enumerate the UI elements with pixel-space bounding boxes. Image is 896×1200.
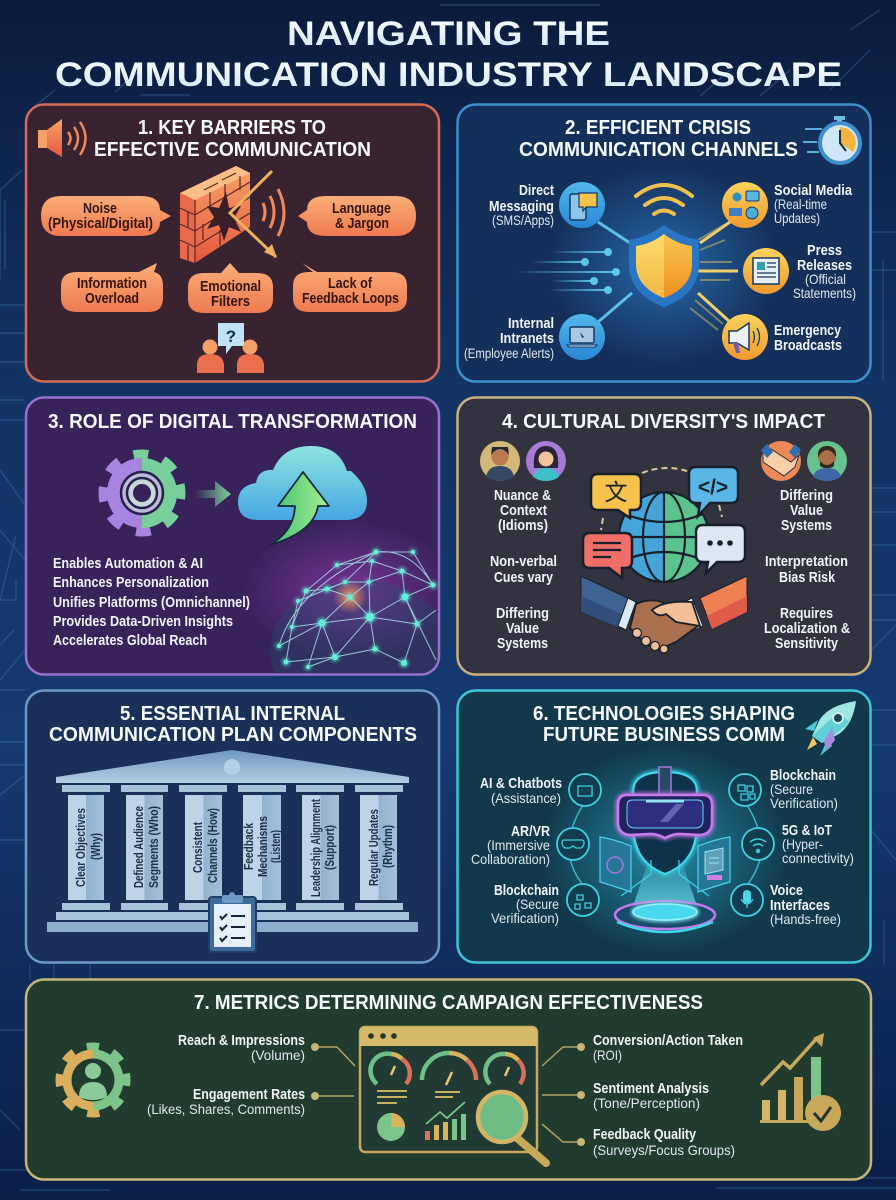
bullet list: Unifies Platforms (Omnichannel) [53, 594, 250, 611]
right labels: Sensitivity [775, 635, 839, 652]
illustration: temple steps [47, 912, 418, 932]
right labels: Localization & [764, 620, 850, 637]
bullet list: Enables Automation & AI [53, 555, 203, 572]
labels left: Engagement Rates [193, 1086, 305, 1103]
illustration: handshake [581, 576, 747, 653]
labels left: AI & Chatbots [480, 775, 562, 792]
labels right: Blockchain [770, 767, 836, 784]
column: feedback mechanisms: Feedback [241, 822, 256, 870]
icon: broken brick wall with deflected signal [180, 166, 284, 263]
illustration: pediment [56, 750, 409, 783]
labels left: (Volume) [251, 1047, 305, 1063]
labels left: (Assistance) [491, 790, 561, 806]
callout: information overload [61, 263, 163, 312]
panel 5: internal plan components [26, 690, 439, 962]
connectors and speed lines [515, 222, 738, 330]
illustration: network globe [254, 529, 438, 673]
pie [377, 1113, 405, 1141]
illustration: orbit arcs and VR head [569, 767, 761, 932]
labels right: (ROI) [593, 1047, 622, 1063]
column: leadership alignment [296, 785, 344, 910]
column: feedback mechanisms: Mechanisms [255, 816, 270, 877]
channel: internal intranets: Intranets [500, 330, 554, 347]
labels right: connectivity) [782, 850, 854, 866]
right labels: Interpretation [765, 553, 848, 570]
column: leadership alignment: Leadership Alignment [308, 799, 323, 897]
heading 7: 7. METRICS DETERMINING CAMPAIGN EFFECTIVENESS [194, 991, 703, 1014]
labels right: (Secure [770, 781, 813, 797]
icon: growth chart with check [760, 1033, 841, 1131]
callout: information overload: Information [77, 275, 147, 292]
callout: language and jargon [298, 196, 416, 236]
labels right: Interfaces [770, 897, 830, 914]
heading 2: COMMUNICATION CHANNELS [519, 138, 798, 161]
icon: gear [98, 449, 186, 537]
labels right: Verification) [770, 795, 838, 811]
channel: internal intranets: Internal [508, 315, 554, 332]
channel: press releases: Statements) [793, 285, 856, 301]
column: regular updates: (Rhythm) [380, 825, 395, 868]
icon row left: AI, AR/VR, blockchain [557, 774, 601, 916]
callout: noise: (Physical/Digital) [48, 215, 153, 232]
heading 5: 5. ESSENTIAL INTERNAL [120, 702, 345, 725]
title [55, 15, 842, 94]
labels left: Collaboration) [471, 851, 550, 867]
column: regular updates: Regular Updates [366, 809, 381, 886]
bullet list: Accelerates Global Reach [53, 632, 207, 649]
column: clear objectives: Clear Objectives [73, 808, 88, 887]
channel: press releases [743, 242, 856, 301]
panel 2: crisis channels [458, 104, 870, 382]
column: defined audience [121, 785, 168, 910]
arrow: gear to cloud [195, 481, 231, 507]
icon: magnifier [478, 1092, 546, 1163]
right labels: Value [790, 502, 823, 519]
heading 3: 3. ROLE OF DIGITAL TRANSFORMATION [48, 410, 417, 433]
left labels: Nuance & [494, 487, 551, 504]
left labels: Differing [496, 605, 549, 622]
labels right: Sentiment Analysis [593, 1080, 709, 1097]
labels left: AR/VR [511, 823, 550, 840]
column: regular updates [355, 785, 403, 910]
avatars right [761, 441, 847, 481]
callout: language and jargon: Language [332, 200, 391, 217]
avatars left [480, 441, 566, 481]
icon: gear with person [54, 1041, 132, 1119]
left labels: Non-verbal [490, 553, 557, 570]
labels right [593, 1032, 743, 1158]
right labels: Systems [781, 517, 832, 534]
illustration: dashboard window [360, 1027, 537, 1152]
callout: emotional filters: Filters [211, 293, 250, 310]
icon: clipboard checklist [209, 892, 256, 952]
column: leadership alignment: (Support) [322, 825, 337, 870]
illustration: globe with speech bubbles: </> [698, 476, 728, 499]
heading 5 [49, 702, 417, 746]
title: COMMUNICATION INDUSTRY LANDSCAPE [55, 56, 842, 94]
icon row right: blockchain, 5G, voice [729, 774, 774, 916]
right labels: Bias Risk [779, 569, 836, 586]
panel 4: cultural diversity [458, 398, 870, 674]
channel: direct messaging [489, 182, 605, 228]
heading 6: FUTURE BUSINESS COMM [543, 723, 785, 746]
illustration: globe with speech bubbles: 文 [604, 479, 628, 505]
labels left [471, 775, 562, 926]
channel: direct messaging: Direct [519, 182, 554, 199]
labels left: (Immersive [487, 837, 550, 853]
channel: press releases: (Official [805, 271, 846, 287]
left labels: Context [500, 502, 547, 519]
column: defined audience: Defined Audience [131, 806, 146, 888]
heading 6: 6. TECHNOLOGIES SHAPING [533, 702, 795, 725]
labels right: (Hands-free) [770, 911, 841, 927]
labels right: Conversion/Action Taken [593, 1032, 743, 1049]
panel 6: future technologies [458, 690, 870, 962]
channel: press releases: Press [807, 242, 842, 259]
column: consistent channels: Channels (How) [205, 808, 220, 883]
labels right: 5G & IoT [782, 822, 832, 839]
heading 2: 2. EFFICIENT CRISIS [565, 116, 751, 139]
icon: signal arcs [636, 185, 692, 214]
labels left: (Secure [516, 896, 559, 912]
heading 6 [533, 702, 795, 746]
left labels: Cues vary [494, 569, 554, 586]
right labels [764, 487, 850, 652]
labels right: (Surveys/Focus Groups) [593, 1142, 735, 1158]
labels right: Feedback Quality [593, 1126, 697, 1143]
channel: press releases: Releases [797, 257, 852, 274]
heading 1: EFFECTIVE COMMUNICATION [94, 138, 371, 161]
callout: lack of feedback loops: Feedback Loops [302, 290, 399, 307]
labels right [770, 767, 854, 927]
heading 2 [519, 116, 798, 161]
callout: information overload: Overload [85, 290, 139, 307]
column: consistent channels [179, 785, 227, 910]
column: feedback mechanisms [238, 785, 286, 910]
icon: two people with question [197, 323, 264, 373]
left labels [490, 487, 557, 652]
column: clear objectives: (Why) [88, 833, 103, 860]
column: feedback mechanisms: (Listen) [268, 830, 283, 863]
icon: stopwatch [803, 116, 860, 163]
labels left: Reach & Impressions [178, 1032, 305, 1049]
channel: social media [722, 182, 853, 228]
labels left [147, 1032, 305, 1117]
panel 1: key barriers [26, 104, 439, 382]
callout: noise: Noise [83, 200, 117, 217]
callout: lack of feedback loops: Lack of [328, 275, 373, 292]
left labels: Value [506, 620, 539, 637]
labels left: (Likes, Shares, Comments) [147, 1101, 305, 1117]
channel: emergency broadcasts: Broadcasts [774, 337, 842, 354]
icon: two people with question: ? [226, 327, 236, 346]
left labels: (Idioms) [498, 517, 548, 534]
illustration: globe with speech bubbles [583, 467, 745, 582]
icon: rocket [805, 701, 856, 756]
connectors [311, 1043, 585, 1146]
channel: internal intranets: (Employee Alerts) [464, 345, 554, 361]
channel: social media: Social Media [774, 182, 853, 199]
callout: noise [41, 196, 171, 236]
callout: emotional filters: Emotional [200, 278, 261, 295]
icon: shield [629, 225, 699, 307]
bars and trend [425, 1102, 466, 1140]
heading 5: COMMUNICATION PLAN COMPONENTS [49, 723, 417, 746]
left labels: Systems [497, 635, 548, 652]
channel: direct messaging: (SMS/Apps) [492, 212, 554, 228]
labels left: Verification) [491, 910, 559, 926]
heading 1 [94, 116, 371, 161]
panel 7: campaign metrics [26, 980, 871, 1180]
callout: language and jargon: & Jargon [335, 215, 389, 232]
channel: social media: Updates) [774, 210, 820, 226]
title: NAVIGATING THE [287, 15, 610, 53]
panel 3: digital transformation [24, 396, 440, 676]
right labels: Requires [780, 605, 833, 622]
channel: emergency broadcasts: Emergency [774, 322, 842, 339]
gauges [371, 1053, 524, 1085]
heading 4: 4. CULTURAL DIVERSITY'S IMPACT [502, 410, 825, 433]
bullet list [53, 555, 250, 649]
channel: emergency broadcasts [722, 314, 842, 360]
channel: internal intranets [464, 314, 605, 361]
column: defined audience: Segments (Who) [146, 806, 161, 888]
labels right: Voice [770, 882, 803, 899]
callout: emotional filters [188, 263, 273, 313]
icon: cloud with up arrow [238, 446, 367, 545]
column: consistent channels: Consistent [190, 821, 205, 873]
channel: social media: (Real-time [774, 196, 827, 212]
labels left: Blockchain [494, 882, 559, 899]
summary lines [377, 1091, 460, 1103]
right labels: Differing [780, 487, 833, 504]
column: clear objectives [62, 785, 110, 910]
bullet list: Enhances Personalization [53, 574, 209, 591]
callout: lack of feedback loops [293, 263, 407, 312]
channel: direct messaging: Messaging [489, 198, 554, 215]
bullet list: Provides Data-Driven Insights [53, 613, 233, 630]
labels right: (Tone/Perception) [593, 1095, 700, 1111]
icon: speaker [38, 119, 86, 157]
labels right: (Hyper- [782, 836, 823, 852]
heading 1: 1. KEY BARRIERS TO [138, 116, 326, 139]
